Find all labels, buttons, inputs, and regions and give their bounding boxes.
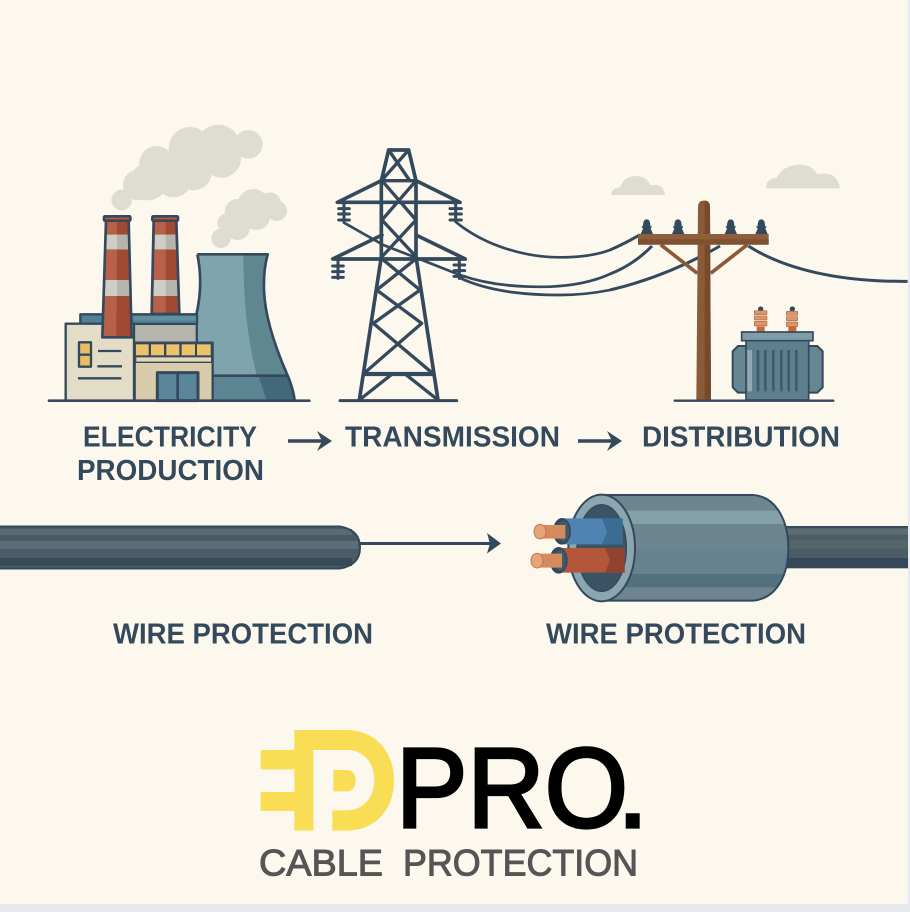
smoke cloud large	[111, 125, 263, 210]
tower frame	[333, 150, 465, 401]
smoke cloud small	[211, 189, 287, 248]
wires	[610, 235, 908, 290]
logo mark	[261, 730, 394, 831]
arrow: transmission to distribution	[578, 431, 622, 451]
ground line	[675, 397, 833, 404]
transformer	[733, 306, 823, 400]
label: electricity production	[77, 422, 264, 487]
blue wire	[534, 518, 623, 545]
icon: distribution pole and transformer	[610, 165, 908, 401]
cooling tower	[197, 254, 295, 401]
right building	[135, 343, 213, 401]
label: electricity production: PRODUCTION	[77, 455, 264, 487]
grey wall	[133, 324, 197, 343]
logo tagline: PROTECTION	[403, 842, 638, 884]
red wire	[531, 547, 625, 574]
icon: power plant	[49, 125, 309, 401]
outgoing cable	[783, 526, 908, 568]
label: wire protection right: WIRE PROTECTION	[546, 618, 806, 650]
logo tagline: CABLE	[259, 842, 383, 884]
conductors	[344, 223, 610, 295]
logo wordmark: PRO	[396, 725, 628, 851]
label: transmission: TRANSMISSION	[345, 422, 560, 454]
logo tagline	[259, 842, 638, 884]
roof band	[80, 314, 197, 324]
logo wordmark: .	[617, 725, 648, 851]
sleeve body	[597, 495, 790, 601]
ground line	[49, 397, 309, 405]
left building	[66, 324, 134, 401]
sleeve opening	[568, 495, 635, 601]
label: wire protection left: WIRE PROTECTION	[113, 618, 373, 650]
icon: transmission tower	[333, 150, 610, 401]
insulators	[641, 219, 768, 234]
pole	[638, 201, 769, 400]
chimney 1	[102, 216, 132, 337]
insulators	[333, 203, 465, 278]
icon: cable cross-section	[531, 495, 908, 601]
arrow: production to transmission	[288, 431, 332, 451]
logo	[259, 725, 648, 884]
chimney 2	[152, 216, 179, 314]
clouds	[611, 165, 840, 195]
arrow: cable to cross-section	[360, 533, 501, 554]
icon: sheathed cable	[0, 526, 360, 568]
label: distribution: DISTRIBUTION	[642, 422, 840, 454]
label: electricity production: ELECTRICITY	[83, 422, 257, 454]
